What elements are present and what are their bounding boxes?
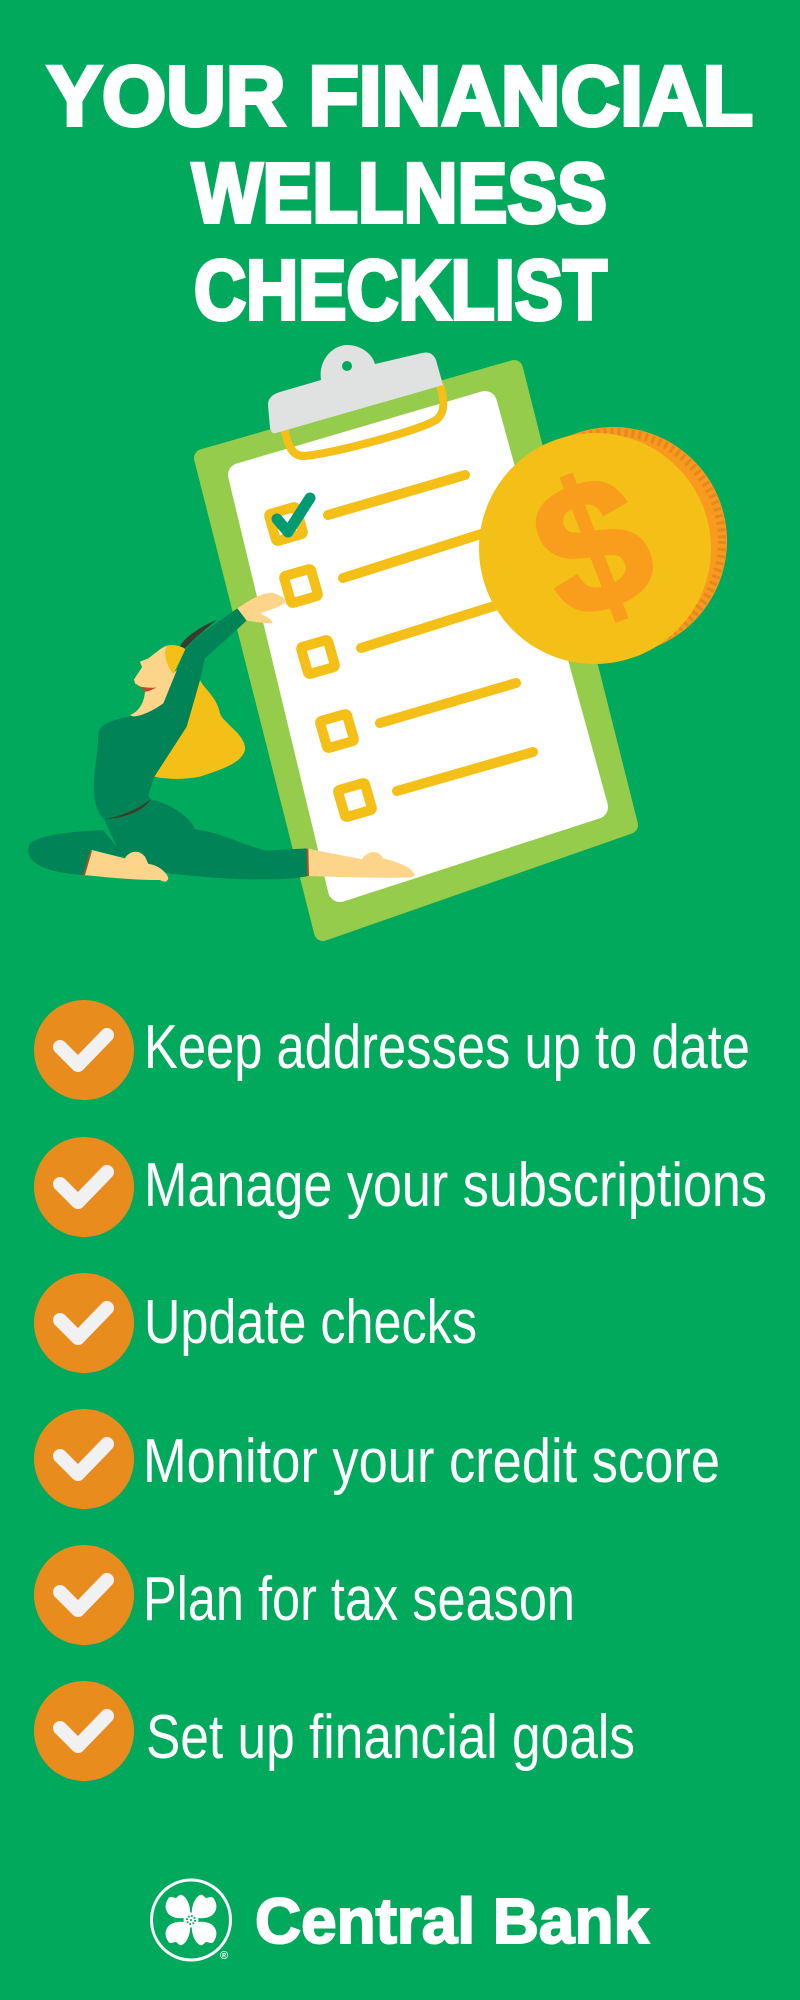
item: manage subscriptions	[34, 1137, 767, 1237]
back leg	[28, 830, 168, 875]
title: WELLNESS	[192, 146, 607, 240]
title: CHECKLIST	[194, 243, 607, 337]
head hair	[165, 645, 185, 674]
item: set up financial goals	[34, 1681, 635, 1781]
title	[47, 49, 753, 337]
hair	[154, 680, 245, 779]
checklist row 5	[338, 752, 533, 817]
item: update checks	[34, 1273, 477, 1373]
checklist row 1	[269, 475, 465, 541]
icon: clover emblem	[152, 1880, 230, 1962]
illustration: woman in yoga pose	[28, 593, 415, 882]
item: set up financial goals: Set up financial goals	[146, 1703, 635, 1772]
item: plan for tax season	[34, 1545, 575, 1645]
torso and raised arm	[94, 608, 247, 819]
item: plan for tax season: Plan for tax season	[143, 1565, 575, 1634]
clip plate	[268, 345, 443, 433]
dark hair behind arm	[180, 620, 217, 648]
face and neck	[130, 646, 183, 717]
checklist row 4	[320, 683, 516, 748]
dollar sign: $	[508, 432, 678, 662]
waist shadow	[104, 799, 151, 819]
logo: Central Bank	[152, 1880, 649, 1962]
tucked foot	[83, 850, 168, 882]
hand	[237, 593, 285, 623]
item: update checks: Update checks	[144, 1288, 477, 1357]
front leg	[104, 799, 308, 879]
clipboard board	[203, 369, 629, 932]
clip band	[284, 385, 443, 456]
wordmark: Central Bank	[255, 1885, 649, 1957]
checklist	[34, 1000, 767, 1781]
checklist row 2	[284, 528, 500, 603]
illustration: gold coin	[479, 427, 727, 664]
item: monitor credit score	[34, 1409, 720, 1509]
leg cuffs	[84, 849, 308, 876]
title: YOUR FINANCIAL	[47, 49, 753, 143]
clipboard paper	[240, 403, 596, 890]
illustration: clipboard	[203, 345, 629, 932]
checklist row 3	[301, 601, 510, 674]
icon: clover emblem: ®	[220, 1950, 228, 1962]
extended foot	[308, 849, 415, 878]
item: keep addresses	[34, 1000, 750, 1100]
neck shadow	[139, 687, 157, 692]
